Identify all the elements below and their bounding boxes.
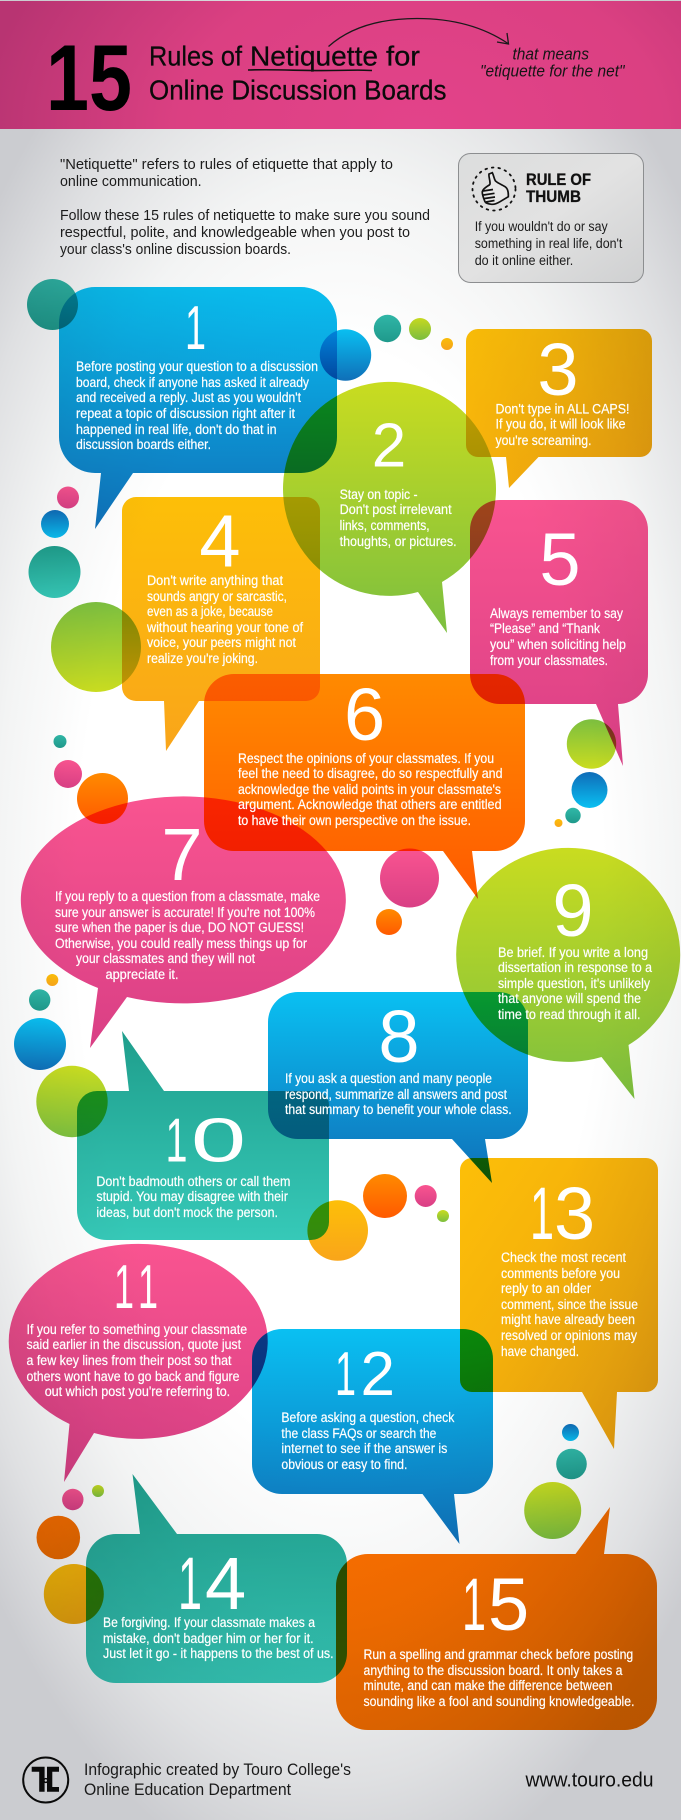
- rule 10 number and text: [96, 1107, 290, 1220]
- rule 12 number and text: 1: [335, 1340, 356, 1409]
- rule 9 number and text: that anyone will spend the: [498, 991, 641, 1006]
- rule 7 number and text: sure when the paper is due, DO NOT GUESS!: [55, 920, 304, 935]
- definition: that means etiquette for the net: that means: [512, 44, 589, 63]
- speech bubble 6: [204, 674, 525, 899]
- rule 15 number and text: [364, 1563, 634, 1709]
- rule 3 number and text: [496, 328, 630, 448]
- title underline on Netiquette: [248, 69, 372, 72]
- rule 6 number and text: argument. Acknowledge that others are entitled: [238, 797, 502, 812]
- rule 13 number and text: comment, since the issue: [501, 1297, 638, 1312]
- rule 10 number and text: 0: [191, 1107, 246, 1176]
- rule 13 number and text: resolved or opinions may: [501, 1328, 637, 1343]
- rule of thumb text: do it online either.: [475, 253, 573, 268]
- arrow from Netiquette to definition: [328, 18, 508, 46]
- intro text: respectful, polite, and knowledgeable when you post to: [60, 224, 410, 241]
- rule 5 number and text: from your classmates.: [490, 653, 608, 668]
- rule 9 number and text: Be brief. If you write a long: [498, 945, 648, 960]
- title number 15: 15: [46, 25, 132, 130]
- rule 15 number and text: sounding like a fool and sounding knowledgeable.: [364, 1694, 634, 1709]
- rule 8 number and text: If you ask a question and many people: [285, 1071, 492, 1086]
- rule 13 number and text: reply to an older: [501, 1281, 591, 1296]
- rule 7 number and text: 7: [161, 813, 203, 896]
- rule 12 number and text: Before asking a question, check: [281, 1410, 455, 1425]
- rule 15 number and text: anything to the discussion board. It only takes a: [364, 1663, 623, 1678]
- rule 12 number and text: 2: [360, 1340, 395, 1409]
- rule 2 number and text: Stay on topic -: [340, 487, 418, 502]
- rule 9 number and text: simple question, it's unlikely: [498, 976, 650, 991]
- rule 4 number and text: [146, 500, 303, 666]
- title: Netiquette: [250, 41, 378, 72]
- rule 14 number and text: Just let it go - it happens to the best of us.: [103, 1646, 334, 1661]
- speech bubble 11: [9, 1244, 268, 1482]
- rule of thumb text: something in real life, don't: [475, 236, 623, 251]
- icon: Touro College logo: [23, 1758, 68, 1802]
- panel: rule of thumb: [458, 154, 644, 282]
- intro text: Follow these 15 rules of netiquette to make sure you sound: [60, 207, 430, 224]
- intro text: [60, 156, 430, 258]
- rule 1 number and text: 1: [185, 294, 206, 363]
- icon: thumbs up: [472, 168, 516, 210]
- rule 12 number and text: internet to see if the answer is: [281, 1441, 448, 1456]
- rule 1 number and text: repeat a topic of discussion right after it: [76, 406, 295, 421]
- definition: that means etiquette for the net: "etiquette for the net": [480, 62, 625, 81]
- rule 15 number and text: Run a spelling and grammar check before posting: [364, 1647, 633, 1662]
- rule 11 number and text: a few key lines from their post so that: [26, 1353, 232, 1368]
- rule 13 number and text: 1: [530, 1172, 554, 1255]
- rule 3 number and text: you're screaming.: [496, 433, 592, 448]
- speech bubble 3: [466, 329, 652, 488]
- rule 4 number and text: sounds angry or sarcastic,: [147, 589, 287, 604]
- rule 5 number and text: you” when soliciting help: [490, 637, 626, 652]
- rule 2 number and text: links, comments,: [340, 518, 430, 533]
- rule of thumb text: [475, 219, 623, 268]
- rule 11 number and text: said earlier in the discussion, quote just: [26, 1337, 241, 1352]
- rule 7 number and text: Otherwise, you could really mess things up for: [55, 936, 307, 951]
- rule 6 number and text: acknowledge the valid points in your classmate's: [238, 782, 501, 797]
- rule 11 number and text: [26, 1253, 247, 1399]
- rule of thumb heading: RULE OF: [526, 171, 591, 189]
- rule 1 number and text: happened in real life, don't do that in: [76, 422, 277, 437]
- footer credit text: [84, 1760, 351, 1799]
- rule 5 number and text: Always remember to say: [490, 606, 623, 621]
- intro text: "Netiquette" refers to rules of etiquette that apply to: [60, 156, 393, 173]
- rule 11 number and text: others wont have to go back and figure: [26, 1369, 240, 1384]
- speech bubble 7: [21, 796, 346, 1048]
- rule 1 number and text: discussion boards either.: [76, 437, 211, 452]
- speech bubble 2: [283, 382, 496, 633]
- speech bubble 5: [470, 500, 648, 766]
- speech bubble 8: [268, 992, 528, 1183]
- rule 3 number and text: 3: [537, 328, 579, 411]
- rule 13 number and text: might have already been: [501, 1312, 635, 1327]
- rule 2 number and text: [340, 412, 457, 549]
- speech bubble 4: [122, 497, 320, 751]
- rule 6 number and text: [238, 673, 502, 828]
- speech bubble 9: [456, 848, 680, 1099]
- rule 14 number and text: [103, 1542, 334, 1661]
- rule 13 number and text: comments before you: [501, 1266, 620, 1281]
- speech bubble 13: [460, 1158, 658, 1449]
- rule 5 number and text: “Please” and “Thank: [490, 621, 600, 636]
- rule 2 number and text: 2: [372, 412, 406, 481]
- rule 2 number and text: thoughts, or pictures.: [340, 534, 457, 549]
- rule 13 number and text: Check the most recent: [501, 1250, 626, 1265]
- rule 13 number and text: 3: [554, 1172, 595, 1255]
- rule 10 number and text: stupid. You may disagree with their: [96, 1189, 288, 1204]
- speech bubble 14: [86, 1474, 347, 1683]
- rule 9 number and text: time to read through it all.: [498, 1007, 640, 1022]
- footer credit text: Infographic created by Touro College's: [84, 1760, 351, 1779]
- rule 1 number and text: board, check if anyone has asked it already: [76, 375, 309, 390]
- footer website: www.touro.edu: [525, 1770, 654, 1792]
- intro text: online communication.: [60, 173, 202, 190]
- rule 3 number and text: Don't type in ALL CAPS!: [496, 402, 630, 417]
- rule 6 number and text: feel the need to disagree, do so respectfully and: [238, 766, 502, 781]
- rule 4 number and text: voice, your peers might not: [147, 635, 296, 650]
- title: for: [386, 41, 420, 72]
- rule 11 number and text: out which post you're referring to.: [45, 1384, 230, 1399]
- rule 12 number and text: the class FAQs or search the: [281, 1426, 436, 1441]
- rule 3 number and text: If you do, it will look like: [496, 417, 626, 432]
- rule 11 number and text: If you refer to something your classmate: [26, 1322, 247, 1337]
- rule 1 number and text: and received a reply. Just as you wouldn't: [76, 390, 301, 405]
- rule 5 number and text: [490, 518, 626, 668]
- rule 11 number and text: 1: [114, 1253, 134, 1322]
- header band: [0, 1, 681, 129]
- rule 15 number and text: 1: [462, 1563, 486, 1646]
- rule 7 number and text: your classmates and they will not: [76, 951, 255, 966]
- speech bubble 15: [336, 1507, 657, 1730]
- rule 7 number and text: sure your answer is accurate! If you're not 100%: [55, 905, 315, 920]
- rule 10 number and text: ideas, but don't mock the person.: [96, 1205, 278, 1220]
- rule 7 number and text: If you reply to a question from a classmate, make: [55, 889, 320, 904]
- rule 6 number and text: to have their own perspective on the issue.: [238, 813, 471, 828]
- rule 9 number and text: [498, 869, 652, 1022]
- rule 8 number and text: [285, 995, 512, 1117]
- rule 12 number and text: obvious or easy to find.: [281, 1457, 407, 1472]
- decorative circles: [14, 279, 616, 1624]
- rule 8 number and text: that summary to benefit your whole class.: [285, 1102, 512, 1117]
- rule 14 number and text: 4: [205, 1542, 246, 1625]
- rule 4 number and text: even as a joke, because: [147, 604, 273, 619]
- rule 1 number and text: Before posting your question to a discussion: [76, 359, 318, 374]
- intro text: your class's online discussion boards.: [60, 241, 291, 258]
- rule 6 number and text: 6: [344, 673, 385, 756]
- rule 13 number and text: have changed.: [501, 1344, 579, 1359]
- rule 8 number and text: respond, summarize all answers and post: [285, 1087, 507, 1102]
- rule 12 number and text: [281, 1340, 455, 1472]
- rule 4 number and text: Don't write anything that: [147, 573, 283, 588]
- rule 7 number and text: appreciate it.: [106, 967, 178, 982]
- rule 7 number and text: [55, 813, 320, 982]
- rule 13 number and text: [501, 1172, 638, 1359]
- rule 15 number and text: 5: [488, 1563, 529, 1646]
- speech bubble 10: [77, 1031, 329, 1240]
- rule of thumb text: If you wouldn't do or say: [475, 219, 608, 234]
- rule 9 number and text: 9: [552, 869, 594, 952]
- rule of thumb heading: [526, 171, 591, 206]
- rule 4 number and text: realize you're joking.: [147, 651, 258, 666]
- rule 6 number and text: Respect the opinions of your classmates. If you: [238, 751, 494, 766]
- rule 9 number and text: dissertation in response to a: [498, 960, 652, 975]
- rule 4 number and text: 4: [199, 500, 241, 583]
- rule 15 number and text: minute, and can make the difference between: [364, 1678, 612, 1693]
- definition: that means etiquette for the net: [480, 44, 625, 81]
- rule 5 number and text: 5: [539, 518, 581, 601]
- rule 8 number and text: 8: [378, 995, 420, 1078]
- rule 14 number and text: 1: [178, 1542, 202, 1625]
- speech bubble 1: [59, 287, 337, 529]
- rule 11 number and text: 1: [138, 1253, 158, 1322]
- rule of thumb heading: THUMB: [526, 188, 581, 206]
- rule 1 number and text: [76, 294, 318, 452]
- rule 10 number and text: Don't badmouth others or call them: [96, 1174, 290, 1189]
- title: Online Discussion Boards: [149, 75, 446, 106]
- title: [149, 41, 446, 106]
- footer credit text: Online Education Department: [84, 1780, 291, 1799]
- title: Rules of: [149, 41, 242, 72]
- rule 10 number and text: 1: [166, 1107, 188, 1176]
- rule 14 number and text: Be forgiving. If your classmate makes a: [103, 1615, 315, 1630]
- rule 2 number and text: Don't post irrelevant: [340, 502, 452, 517]
- speech bubble 12: [252, 1329, 493, 1544]
- rule 4 number and text: without hearing your tone of: [146, 620, 303, 635]
- rule 14 number and text: mistake, don't badger him or her for it.: [103, 1631, 314, 1646]
